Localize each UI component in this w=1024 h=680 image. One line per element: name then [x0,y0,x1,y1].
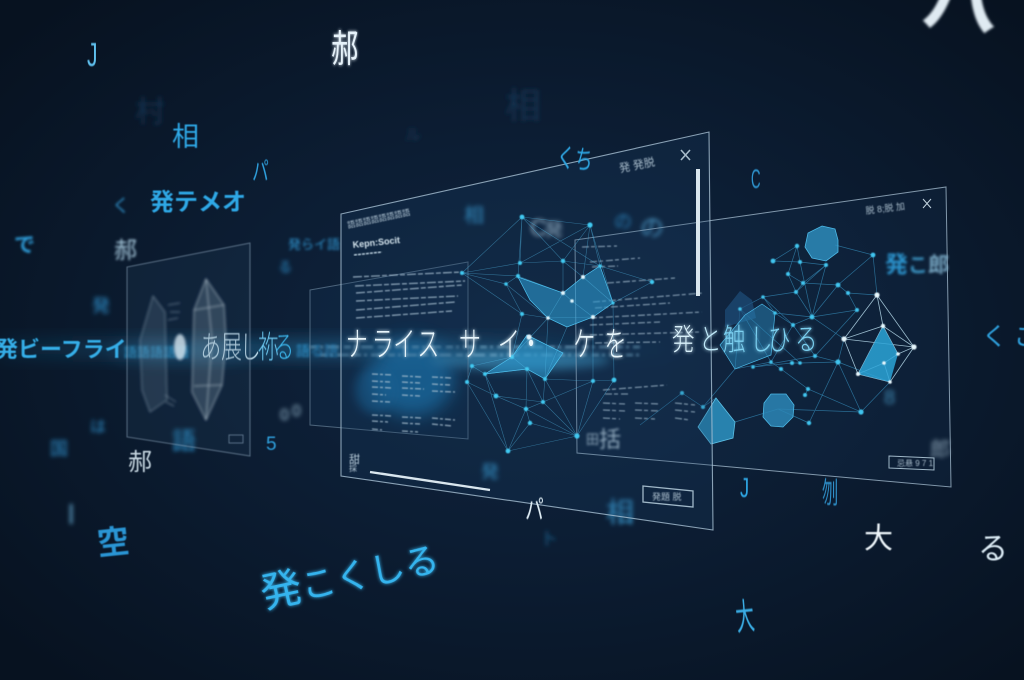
main network bright nodes [526,275,595,340]
shape: heptagon top [805,226,838,261]
main panel bottom left label: 甜 [349,454,360,466]
left panel network shape 1 [140,296,180,412]
glow band [0,340,700,416]
blurred background characters: 相 [505,85,541,126]
text: upper left phrase: 発テメオ [150,189,246,216]
middle panel columns [372,374,455,432]
right panel header text: 脱 8;脱 加 [865,200,905,216]
text: central headline [346,323,817,364]
right panel lower blurred label: 括 [599,427,621,452]
character: right white: る [978,533,1008,566]
blurred background characters: 国 [50,439,68,459]
main panel button: 発題 脱 [652,491,682,502]
character: five: 5 [266,434,277,455]
character: bottom of main panel: パ [525,495,544,525]
main panel button [643,486,693,507]
blurred background characters: る [278,259,292,275]
character: big white: 大 [864,522,893,555]
faceted fill lower [485,335,563,379]
blurred background characters: 郎 [930,438,950,461]
shape: left faceted cluster [720,291,775,369]
blurred background characters: 発 [481,462,499,482]
character: lower blurred white: 郝 [128,449,152,476]
text: left panel phrase: あ展し祢る [200,330,294,365]
right panel close [923,199,931,208]
blurred background characters: 発 [545,220,563,240]
main panel top left label: 語語語語語語語語 [347,208,411,230]
blurred background characters: ト [540,529,558,549]
character: blurred white: 郝 [114,237,137,263]
character: left: で [14,234,35,257]
right panel document lines [582,246,703,420]
blurred background characters: 0 [280,407,289,424]
blurred background characters: 8 [884,387,895,409]
character: top kanji: 郝 [331,29,358,71]
right panel blurred phrase: 発こ郎 [885,251,949,277]
character: small hook: C [751,165,761,194]
character: blue kanji lower: 刎 [822,477,838,510]
panel: middle document [310,262,468,439]
blurred background characters: ル [405,127,421,144]
character: top of main panel: くち [555,143,594,176]
main panel bottom left label: 採 [349,463,357,473]
blurred background characters [50,85,950,549]
blurred background characters: の [640,215,664,242]
main network nodes [460,215,654,453]
main panel progress bar [370,472,490,490]
blurred background characters: 相 [606,497,634,528]
right network nodes [680,244,875,425]
text: small blurred phrase: 発らイ語 [288,237,340,252]
blurred background characters: 村 [135,96,165,129]
blurred background characters: は [90,419,106,436]
left panel network shape 2 [192,279,226,420]
character: katakana: パ [252,158,269,186]
network: main [460,215,654,453]
left panel centre blob [174,334,186,360]
right network lines [640,245,890,425]
panel: left small [127,243,250,456]
text: mid blurred run: 語る語 [296,343,338,359]
character: bottom: 大 [734,597,756,639]
blurred background characters: 0 [292,403,301,420]
left panel button [229,435,243,443]
main panel heading: Kepn:Socit [352,235,400,250]
character: hook left: J [87,36,97,73]
main panel header text: 発 発脱 [618,154,656,175]
blurred background characters: C [530,215,547,242]
right panel button [889,456,934,470]
blurred background characters: の [614,212,632,232]
text: central headline right: 発と触しひる [672,323,817,357]
text: central headline: ナライスサイ・ケを [346,326,627,364]
main panel subheading line [354,252,382,255]
text: left blurred run: 語語語語語 [124,345,189,360]
middle panel lines [353,272,465,318]
text: big blue phrase: 発こくしる [256,534,443,617]
panel: right [575,187,951,487]
blurred background characters: 発 [92,296,110,316]
right network polyhedron wire [844,295,914,382]
network: right [640,226,917,444]
shape: heptagon lower [763,394,794,427]
right panel button: 忌悬 9 7 1 [897,459,934,468]
character: blue J: J [740,472,749,503]
blurred background characters: 語 [172,428,196,455]
shape: pentagon lower left [698,398,735,444]
character: small: く [112,196,130,216]
main network lines [462,217,652,451]
character: lower left: 空 [95,523,131,562]
blurred background characters: l [68,499,74,530]
right panel lower blurred label: 田 [586,432,599,447]
blurred background characters: 相 [464,204,484,227]
character: blue kanji: 相 [172,122,199,152]
panel: main [341,132,713,530]
right polyhedron nodes [841,292,917,384]
main panel close [681,150,690,160]
main panel scrollbar [696,169,700,296]
right polyhedron fill [858,326,898,382]
faceted fill upper [518,266,613,327]
